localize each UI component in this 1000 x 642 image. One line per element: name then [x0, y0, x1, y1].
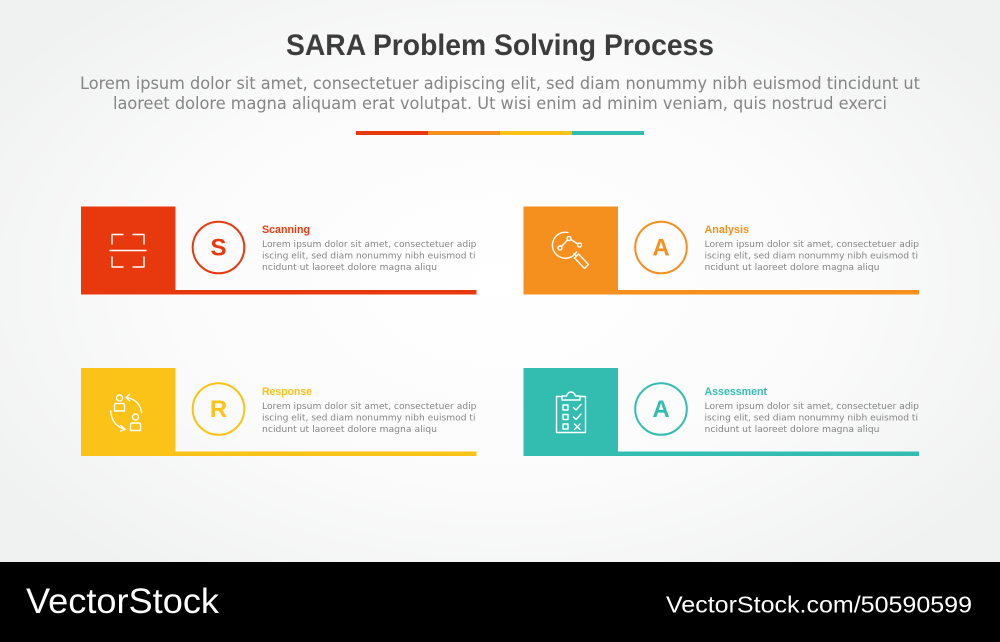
panel: assessment	[524, 368, 919, 456]
underline bar: assessment	[618, 452, 919, 456]
body text: analysis: ncidunt ut laoreet dolore magna aliqu	[704, 263, 880, 273]
heading: Assessment: Assessment	[704, 386, 767, 398]
watermark logo text: VectorStock	[26, 582, 220, 621]
panel: response	[81, 368, 477, 456]
underline bar: analysis	[618, 290, 919, 294]
subtitle: laoreet dolore magna aliquam erat volutpat. Ut wisi enim ad minim veniam, quis nostrud exerci	[113, 94, 887, 113]
body text: response: ncidunt ut laoreet dolore magna aliqu	[262, 425, 437, 435]
subtitle: Lorem ipsum dolor sit amet, consectetuer adipiscing elit, sed diam nonummy nibh euismod tincidunt ut	[80, 74, 921, 93]
body text: scanning: ncidunt ut laoreet dolore magna aliqu	[262, 263, 437, 273]
icon: magnifier chart	[552, 232, 588, 268]
body text: scanning: iscing elit, sed diam nonummy nibh euismod ti	[262, 252, 476, 262]
underline bar: response	[175, 452, 476, 456]
heading: Analysis: Analysis	[704, 224, 749, 236]
icon: checklist clipboard	[556, 392, 586, 432]
panel: scanning	[81, 206, 477, 294]
heading: Scanning: Scanning	[262, 224, 310, 236]
letter circle: A: A	[652, 396, 670, 423]
letter circle: S: S	[210, 234, 227, 262]
body text: assessment: ncidunt ut laoreet dolore magna aliqu	[704, 425, 880, 435]
letter circle: A	[635, 222, 687, 273]
letter circle: R	[193, 383, 244, 435]
colour divider	[356, 131, 644, 135]
footer band	[0, 562, 1000, 642]
letter circle: A	[635, 383, 687, 435]
letter circle: R: R	[210, 396, 227, 423]
block: response	[81, 368, 176, 456]
watermark url: VectorStock.com/50590599	[666, 592, 972, 618]
body text: assessment	[704, 402, 919, 435]
body text: response: iscing elit, sed diam nonummy nibh euismod ti	[262, 414, 476, 424]
body text: scanning: Lorem ipsum dolor sit amet, consectetuer adip	[262, 240, 477, 250]
body text: assessment: iscing elit, sed diam nonummy nibh euismod ti	[704, 414, 918, 424]
body text: analysis: iscing elit, sed diam nonummy nibh euismod ti	[704, 252, 918, 262]
letter circle: A: A	[652, 234, 670, 262]
block: analysis	[524, 206, 618, 294]
block: scanning	[81, 206, 176, 294]
body text: response	[262, 402, 477, 435]
body text: assessment: Lorem ipsum dolor sit amet, consectetuer adip	[704, 402, 919, 412]
body text: scanning	[262, 240, 477, 273]
icon: scan frame	[110, 234, 146, 267]
icon: people cycle	[111, 394, 142, 431]
title: SARA Problem Solving Process	[286, 29, 714, 62]
body text: analysis: Lorem ipsum dolor sit amet, consectetuer adip	[704, 240, 919, 250]
block: assessment	[524, 368, 618, 456]
letter circle: S	[193, 222, 244, 273]
panel: analysis	[524, 206, 919, 294]
body text: response: Lorem ipsum dolor sit amet, consectetuer adip	[262, 402, 477, 412]
underline bar: scanning	[175, 290, 476, 294]
body text: analysis	[704, 240, 919, 273]
heading: Response: Response	[262, 386, 312, 398]
subtitle	[80, 74, 921, 113]
